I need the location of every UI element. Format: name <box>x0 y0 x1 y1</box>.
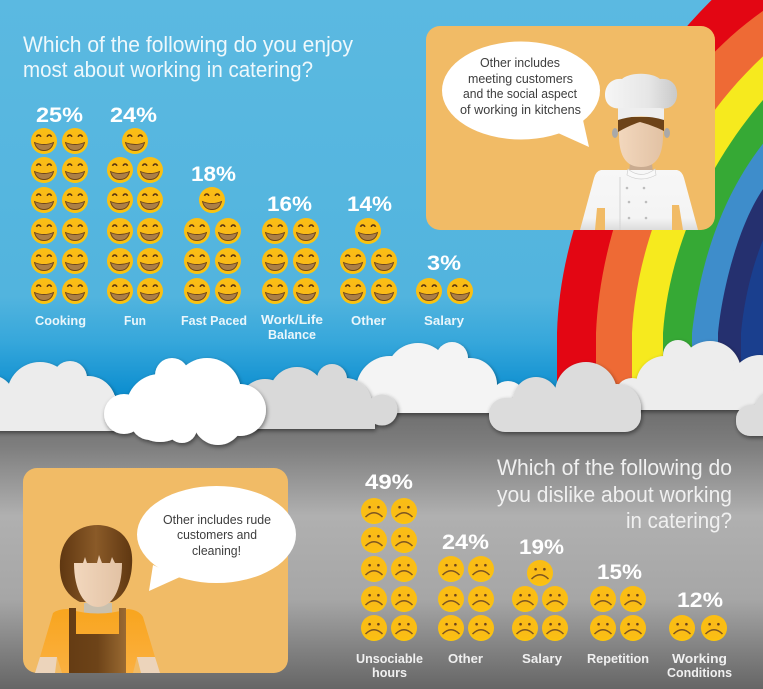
chart: dislikes <box>356 471 732 680</box>
background: grey ground <box>0 410 763 689</box>
title: dislike question <box>497 455 732 533</box>
column: Salary 3%: Salary <box>424 314 464 328</box>
column: Fast Paced 18% <box>181 163 247 328</box>
column: Fast Paced 18%: 18% <box>191 163 236 186</box>
icon: worker <box>35 525 160 673</box>
speech bubble: worker: Other includes rude <box>163 512 271 527</box>
column: Repetition 15%: Repetition <box>587 652 649 666</box>
column: Cooking 25%: 25% <box>36 104 83 127</box>
column: Salary 3%: 3% <box>427 252 461 275</box>
column: Work/Life Balance 16%: Work/Life <box>261 313 323 327</box>
speech bubble: worker <box>137 486 296 591</box>
column: Cooking 25%: Cooking <box>35 314 86 328</box>
speech bubble: worker: customers and <box>177 527 257 542</box>
column: Working Conditions 12%: Working <box>672 652 727 666</box>
column: Salary 19% <box>512 536 568 666</box>
column: Working Conditions 12%: Conditions <box>667 666 732 680</box>
speech bubble: chef: meeting customers <box>468 71 573 86</box>
speech bubble: chef <box>442 42 600 147</box>
title: dislike question: in catering? <box>626 508 732 533</box>
column: Working Conditions 12% <box>667 589 732 680</box>
column: Unsociable hours 49%: Unsociable <box>356 652 423 666</box>
column: Repetition 15%: 15% <box>597 561 642 584</box>
column: Unsociable hours 49%: 49% <box>365 471 413 494</box>
column: Other 14%: 14% <box>347 193 392 216</box>
column: Unsociable hours 49%: hours <box>372 666 407 680</box>
column: Salary 19%: 19% <box>519 536 564 559</box>
speech bubble: worker: cleaning! <box>192 543 241 558</box>
title: enjoy question: Which of the following do you enjoy <box>23 32 353 57</box>
column: Work/Life Balance 16%: Balance <box>268 328 316 342</box>
column: Salary 3% <box>416 252 473 328</box>
title: enjoy question: most about working in catering? <box>23 57 313 82</box>
title: enjoy question <box>23 32 353 82</box>
column: Work/Life Balance 16% <box>261 193 323 342</box>
column: Other 24%: 24% <box>442 531 489 554</box>
title: dislike question: Which of the following do <box>497 455 732 480</box>
column: Cooking 25% <box>31 104 88 328</box>
panel: chef callout <box>426 26 715 230</box>
column: Other 14% <box>340 193 397 328</box>
column: Other 24% <box>438 531 494 666</box>
clouds <box>0 340 763 445</box>
column: Salary 19%: Salary <box>522 652 562 666</box>
chart: likes <box>31 104 473 342</box>
speech bubble: chef: of working in kitchens <box>460 102 581 117</box>
column: Other 14%: Other <box>351 314 386 328</box>
panel: worker callout <box>23 468 296 673</box>
speech bubble: chef: Other includes <box>480 55 560 70</box>
speech bubble: chef: and the social aspect <box>463 86 577 101</box>
column: Fun 24% <box>107 104 163 328</box>
title: dislike question: you dislike about working <box>497 482 732 507</box>
column: Work/Life Balance 16%: 16% <box>267 193 312 216</box>
column: Fun 24%: 24% <box>110 104 157 127</box>
rainbow <box>557 0 763 395</box>
background: sky <box>0 0 763 412</box>
column: Other 24%: Other <box>448 652 483 666</box>
column: Fun 24%: Fun <box>124 314 146 328</box>
column: Repetition 15% <box>587 561 649 666</box>
column: Fast Paced 18%: Fast Paced <box>181 314 247 328</box>
icon: chef <box>580 74 698 230</box>
column: Working Conditions 12%: 12% <box>677 589 723 612</box>
column: Unsociable hours 49% <box>356 471 423 680</box>
